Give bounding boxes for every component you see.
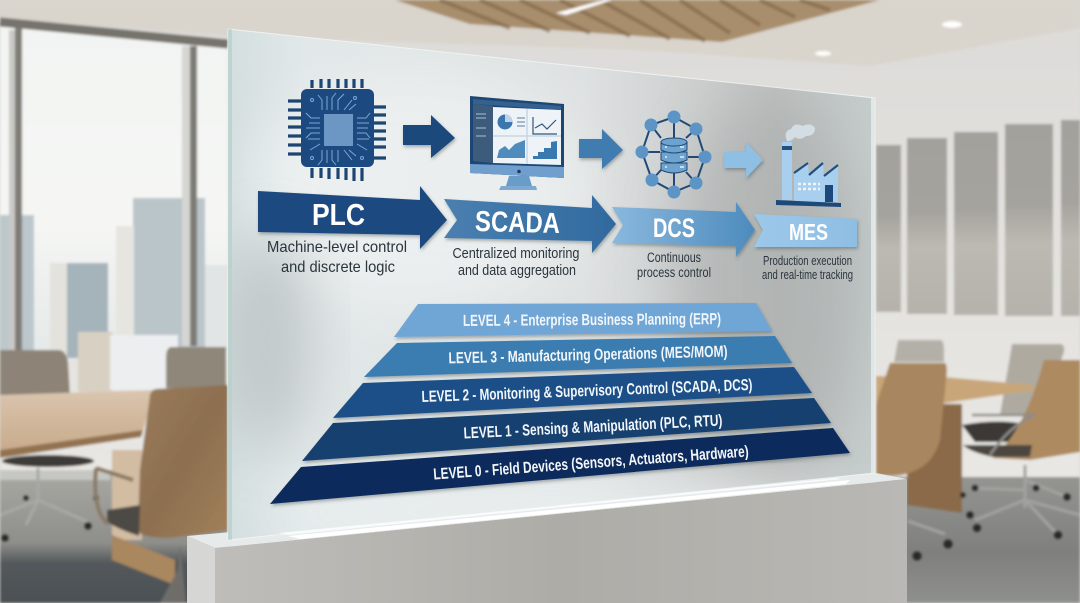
level 4 [394, 303, 772, 337]
level 2: LEVEL 2 - Monitoring & Supervisory Control (SCADA, DCS) [421, 377, 753, 406]
text: PLC description: and discrete logic [281, 259, 395, 276]
arrow: PLC to SCADA icon [403, 115, 455, 158]
pyramid: automation levels [270, 303, 850, 504]
level 1 [302, 398, 831, 461]
text: MES description: Production execution [763, 254, 852, 268]
text: MES description [762, 254, 853, 282]
glass panel [225, 20, 875, 550]
arrow: DCS to MES icon [724, 142, 763, 178]
arrow: SCADA to DCS icon [579, 129, 623, 169]
pedestal left side [187, 536, 215, 603]
pedestal front face [215, 479, 907, 603]
icon: SCADA monitor [470, 96, 564, 190]
table, right [876, 376, 1035, 513]
SCADA label: SCADA [475, 206, 560, 240]
chimney [782, 142, 792, 200]
PLC label: PLC [312, 197, 365, 232]
level 0 [270, 428, 850, 504]
database stack [661, 138, 687, 173]
acoustic wall panels [876, 120, 1080, 316]
arrow: DCS [612, 202, 755, 257]
factory building [794, 163, 838, 202]
factory base [776, 200, 841, 207]
window wall [0, 22, 228, 392]
arrow: MES [754, 214, 857, 247]
front chair, right pair [876, 360, 1080, 561]
icon: DCS database network [636, 110, 712, 198]
level 2 [333, 367, 812, 418]
level 1: LEVEL 1 - Sensing & Manipulation (PLC, RTU) [463, 412, 723, 443]
icon: MES factory [776, 124, 841, 207]
table, left [0, 390, 175, 585]
pedestal [187, 473, 907, 603]
text: SCADA description [452, 246, 580, 279]
text: SCADA description: and data aggregation [458, 263, 576, 279]
factory smoke [786, 124, 815, 141]
text: MES description: and real-time tracking [762, 268, 853, 282]
icon: processor chip [288, 79, 386, 181]
text: DCS description: process control [637, 265, 711, 280]
level 3 [364, 336, 792, 377]
light strip [279, 478, 850, 539]
network nodes [636, 110, 712, 198]
text: PLC description [267, 239, 407, 276]
text: PLC description: Machine-level control [267, 239, 407, 256]
text: DCS description: Continuous [647, 250, 701, 265]
pedestal top [187, 473, 907, 548]
ceiling [0, 0, 1080, 66]
level 4: LEVEL 4 - Enterprise Business Planning (ERP) [463, 311, 721, 330]
DCS label: DCS [653, 213, 695, 243]
floor [876, 477, 1080, 603]
monitor body [470, 96, 564, 178]
MES label: MES [789, 219, 828, 245]
level 0: LEVEL 0 - Field Devices (Sensors, Actuators, Hardware) [433, 443, 749, 484]
swivel chair under table, left [0, 455, 99, 542]
arrow: PLC [258, 186, 447, 249]
monitor stand [506, 176, 532, 186]
dashboard [493, 107, 561, 165]
text: DCS description [637, 250, 711, 280]
arrow: SCADA [444, 195, 616, 253]
text: SCADA description: Centralized monitoring [452, 246, 580, 262]
chairs behind table, left [0, 347, 226, 396]
front chair, left [95, 385, 228, 603]
level 3: LEVEL 3 - Manufacturing Operations (MES/MOM) [448, 344, 728, 367]
chairs behind table, right [894, 340, 1064, 442]
network links [642, 117, 705, 192]
